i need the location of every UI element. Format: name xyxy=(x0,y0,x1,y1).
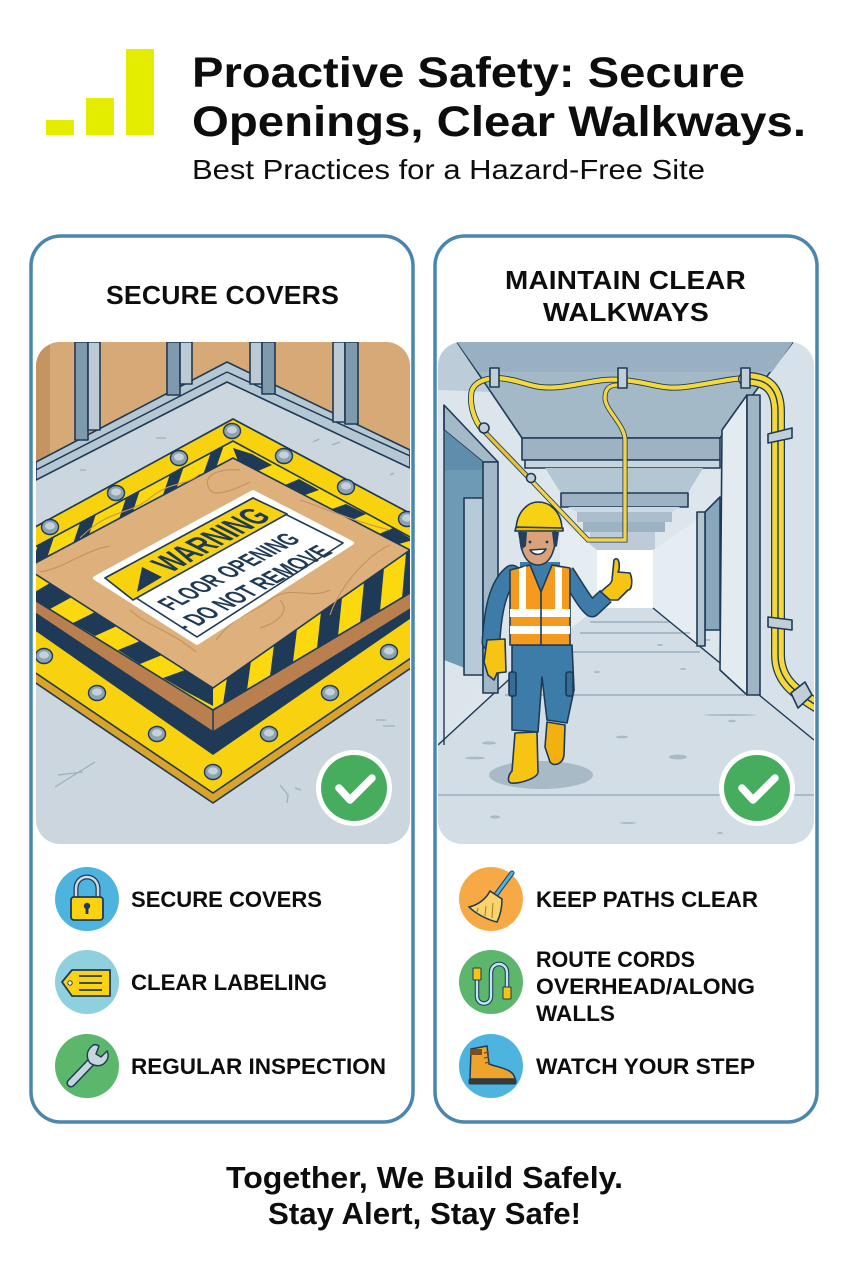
head xyxy=(520,530,555,565)
cables xyxy=(471,378,816,705)
subtitle: Best Practices for a Hazard-Free Site xyxy=(192,154,705,185)
trousers xyxy=(512,645,574,732)
bolts xyxy=(36,424,416,780)
hazard tape xyxy=(20,441,425,710)
heading: maintain clear walkways: MAINTAIN CLEAR xyxy=(505,265,746,295)
icon: tag xyxy=(55,950,119,1014)
floor scuffs xyxy=(55,438,395,803)
worker giving thumbs up xyxy=(484,502,632,789)
panel: secure covers xyxy=(15,236,430,1122)
label: keep paths clear: KEEP PATHS CLEAR xyxy=(536,887,758,912)
footer message: Stay Alert, Stay Safe! xyxy=(268,1196,581,1231)
hard hat xyxy=(516,502,562,531)
icon: broom xyxy=(459,867,523,931)
arms xyxy=(491,574,512,642)
board side xyxy=(36,594,410,731)
label: secure covers: SECURE COVERS xyxy=(131,887,322,912)
icon: padlock xyxy=(55,867,119,931)
floor marks xyxy=(465,644,756,834)
title: Proactive Safety: Secure xyxy=(192,49,745,97)
icon: wrench xyxy=(55,1034,119,1098)
illustration: floor opening cover xyxy=(15,342,430,844)
opening shadow xyxy=(36,610,410,755)
title: Openings, Clear Walkways. xyxy=(192,98,806,146)
steel plate frame xyxy=(15,419,430,803)
heading: secure covers: SECURE COVERS xyxy=(106,280,339,310)
heading: maintain clear walkways: WALKWAYS xyxy=(543,297,709,327)
ceiling xyxy=(457,342,793,438)
right wall and pillar xyxy=(720,395,747,695)
label: route cords: OVERHEAD/ALONG xyxy=(536,974,755,999)
warning sign: FLOOR OPENING xyxy=(151,529,307,614)
warning sign: - DO NOT REMOVE xyxy=(167,542,339,635)
floor xyxy=(438,608,814,844)
gloves xyxy=(484,639,506,680)
warning sign xyxy=(95,492,352,643)
side door xyxy=(705,497,720,630)
warning sign: WARNING xyxy=(142,502,280,577)
wood cover xyxy=(26,458,410,688)
label: route cords: ROUTE CORDS xyxy=(536,947,695,972)
check badge: right xyxy=(719,750,795,826)
heading: maintain clear walkways xyxy=(505,265,746,327)
boots xyxy=(545,722,565,764)
cable clamps xyxy=(479,368,812,708)
label: route cords: WALLS xyxy=(536,1001,615,1026)
label: route cords xyxy=(536,947,755,1026)
label: regular inspection: REGULAR INSPECTION xyxy=(131,1054,386,1079)
check badge: left xyxy=(316,750,392,826)
illustration: clear corridor xyxy=(438,342,816,844)
footer message xyxy=(226,1160,623,1231)
left door xyxy=(444,470,482,668)
torso and vest xyxy=(520,562,560,592)
footer message: Together, We Build Safely. xyxy=(226,1160,623,1195)
logo: yellow signal bars xyxy=(46,49,154,135)
label: watch your step: WATCH YOUR STEP xyxy=(536,1054,755,1079)
icon: work boot xyxy=(459,1034,523,1098)
far opening xyxy=(597,550,653,608)
wall studs xyxy=(75,342,358,440)
icon: cord xyxy=(459,950,523,1014)
title xyxy=(192,49,806,146)
label: clear labeling: CLEAR LABELING xyxy=(131,970,327,995)
panel: maintain clear walkways xyxy=(435,236,817,1122)
